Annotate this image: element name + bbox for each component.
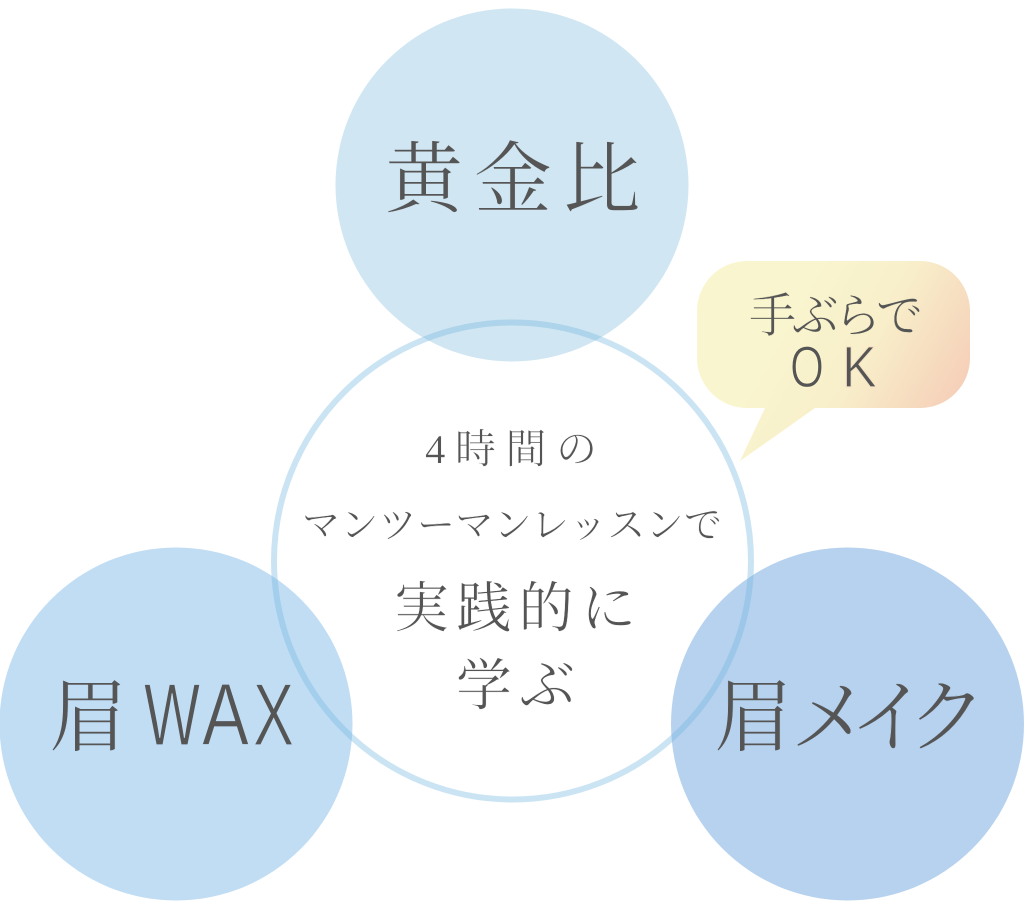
bubble text: O: [790, 335, 824, 400]
label: brow makeup: 眉メイク: [714, 675, 987, 763]
circle: golden ratio: [336, 8, 688, 362]
label: golden ratio: 黄金比: [385, 136, 641, 223]
label: brow wax: 眉: [49, 675, 129, 763]
bubble text: K: [842, 335, 877, 400]
bubble text: 手ぶらで: [749, 291, 923, 343]
center text: 実践的に: [394, 578, 636, 639]
circle: brow makeup: [671, 548, 1024, 900]
center text: [302, 426, 722, 718]
bubble text: [749, 291, 923, 400]
center text: 学ぶ: [456, 656, 575, 718]
circle: brow wax: [0, 548, 352, 900]
speech bubble: [697, 261, 970, 461]
center ring: [274, 322, 751, 800]
label: brow wax: X: [253, 665, 294, 764]
label: brow wax: W: [144, 665, 200, 764]
label: brow wax: [49, 665, 294, 764]
center text: マンツーマンレッスンで: [302, 505, 722, 547]
center text: 4時間の: [425, 426, 597, 472]
label: brow wax: A: [202, 665, 249, 764]
